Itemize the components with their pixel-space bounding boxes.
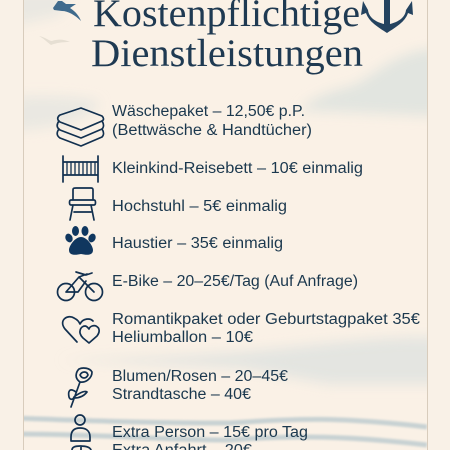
icon: chair bbox=[70, 188, 96, 220]
item: flowers and beach bag bbox=[69, 368, 288, 407]
icon: anchor bbox=[361, 0, 413, 33]
item: e-bike: E-Bike – 20–25€/Tag (Auf Anfrage) bbox=[112, 273, 358, 290]
icon: crib bbox=[63, 156, 98, 182]
item: high chair: Hochstuhl – 5€ einmalig bbox=[112, 198, 287, 215]
item: laundry package: Wäschepaket – 12,50€ p.P. bbox=[112, 103, 305, 120]
item: high chair bbox=[70, 188, 287, 220]
title: Dienstleistungen bbox=[91, 32, 363, 75]
icon: car roof bbox=[72, 446, 91, 450]
item: laundry package: (Bettwäsche & Handtücher) bbox=[112, 122, 312, 139]
icon: faint distant bird bbox=[39, 36, 70, 45]
icon: paw bbox=[64, 226, 97, 255]
item: romance package and balloon bbox=[63, 311, 420, 346]
icon: seagull bbox=[53, 1, 81, 21]
item: extra person and arrival bbox=[71, 415, 308, 450]
item: travel cot bbox=[63, 156, 363, 182]
title bbox=[91, 0, 363, 75]
item: romance package and balloon: Romantikpaket oder Geburtstagpaket 35€ bbox=[112, 311, 420, 328]
icon: hearts bbox=[63, 317, 99, 343]
item: extra person and arrival: Extra Person – 15€ pro Tag bbox=[112, 424, 308, 441]
icon: rose bbox=[69, 368, 92, 407]
item: pet: Haustier – 35€ einmalig bbox=[112, 235, 283, 252]
icon: towel stack bbox=[57, 108, 104, 146]
item: travel cot: Kleinkind-Reisebett – 10€ einmalig bbox=[112, 160, 363, 177]
item: e-bike bbox=[58, 272, 358, 300]
icon: bicycle bbox=[58, 272, 102, 300]
item: pet bbox=[64, 226, 283, 255]
item: laundry package bbox=[57, 103, 312, 146]
item: flowers and beach bag: Strandtasche – 40€ bbox=[112, 386, 251, 403]
icon: person bbox=[71, 415, 90, 441]
item: romance package and balloon: Heliumballon – 10€ bbox=[112, 329, 253, 346]
item: flowers and beach bag: Blumen/Rosen – 20–45€ bbox=[112, 368, 288, 385]
